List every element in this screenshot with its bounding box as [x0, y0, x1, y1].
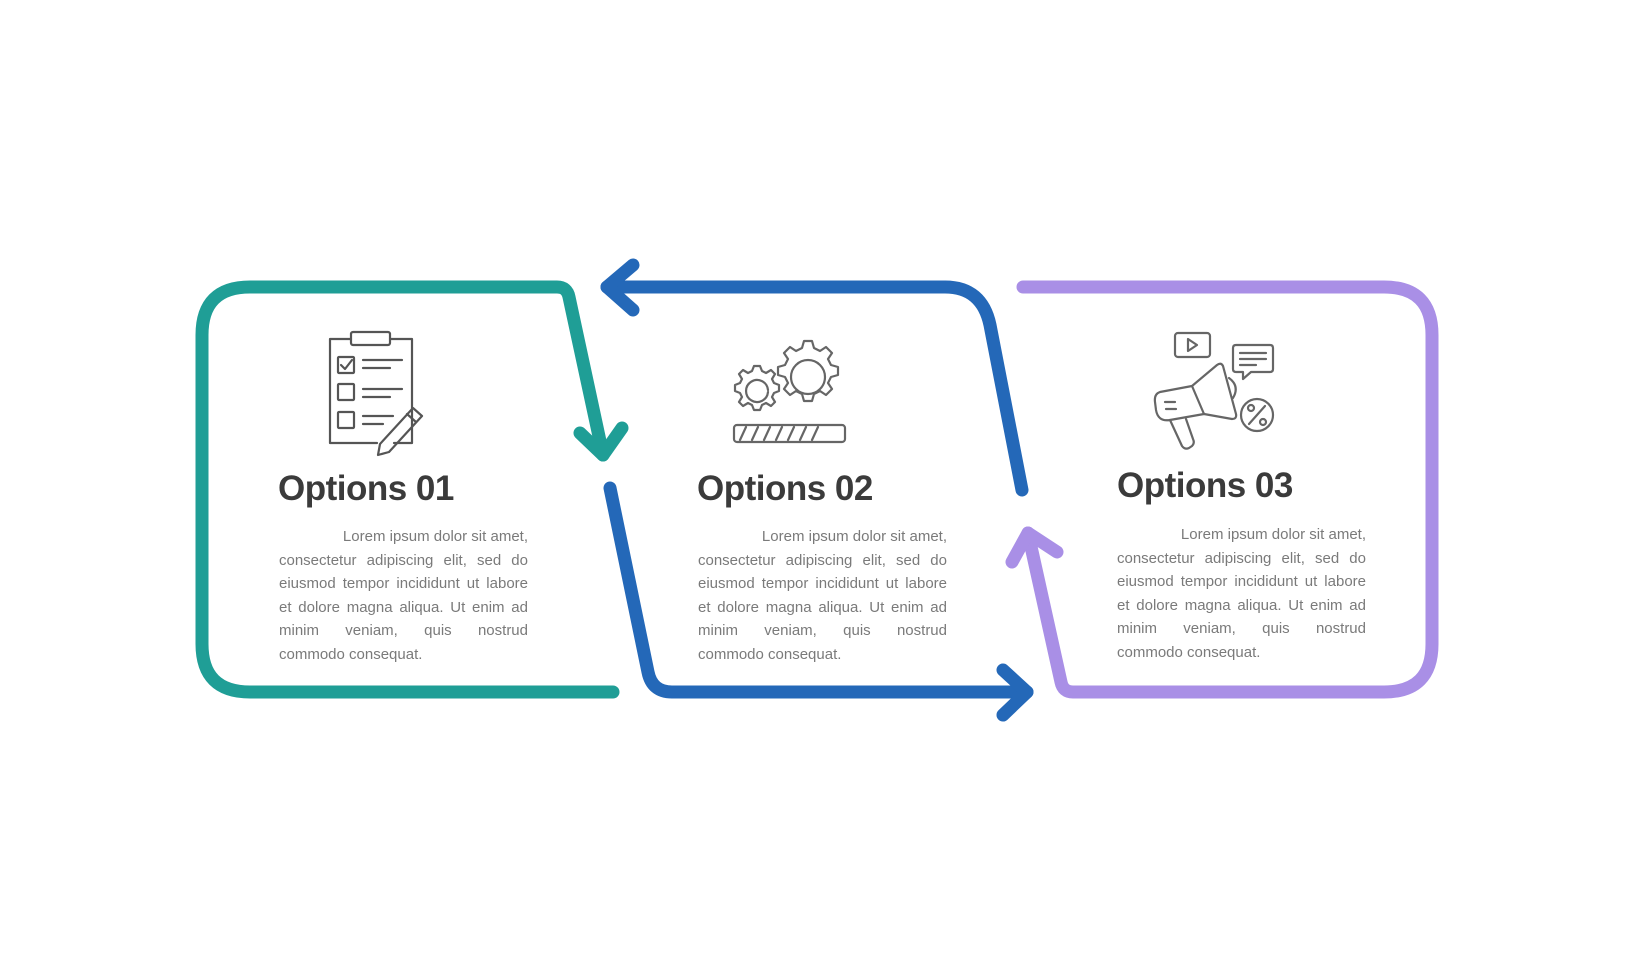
heading: Options 02: Options 02 [697, 469, 873, 508]
text block: option 1 body: et dolore magna aliqua. Ut enim ad [279, 599, 528, 616]
text block: option 1 body: consectetur adipiscing elit, sed do [279, 552, 528, 569]
text block: option 3 body: et dolore magna aliqua. Ut enim ad [1117, 597, 1366, 614]
text block: option 2 body: et dolore magna aliqua. Ut enim ad [698, 599, 947, 616]
icon: megaphone marketing [1155, 333, 1273, 449]
heading: Options 03: Options 03 [1117, 466, 1293, 505]
text block: option 2 body: minim veniam, quis nostrud [698, 622, 947, 639]
text block: option 3 body: commodo consequat. [1117, 644, 1260, 661]
text block: option 3 body: Lorem ipsum dolor sit amet, [1181, 526, 1366, 543]
text block: option 3 body: consectetur adipiscing elit, sed do [1117, 550, 1366, 567]
text block: option 1 body [279, 528, 528, 663]
icon: clipboard checklist [330, 332, 422, 455]
text block: option 3 body [1117, 526, 1366, 661]
text block: option 2 body: commodo consequat. [698, 646, 841, 663]
panel: purple frame with arrow [1012, 287, 1432, 692]
text block: option 3 body: minim veniam, quis nostrud [1117, 620, 1366, 637]
text block: option 1 body: eiusmod tempor incididunt ut labore [279, 575, 528, 592]
text block: option 2 body: consectetur adipiscing elit, sed do [698, 552, 947, 569]
arrow: blue top arrow pointing left [607, 265, 1022, 490]
icon: gears with progress bar [734, 341, 845, 442]
text block: option 2 body: eiusmod tempor incididunt ut labore [698, 575, 947, 592]
arrow: blue bottom arrow pointing right [610, 488, 1027, 715]
text block: option 1 body: commodo consequat. [279, 646, 422, 663]
text block: option 2 body [698, 528, 947, 663]
text block: option 3 body: eiusmod tempor incididunt ut labore [1117, 573, 1366, 590]
text block: option 1 body: Lorem ipsum dolor sit amet, [343, 528, 528, 545]
text block: option 1 body: minim veniam, quis nostrud [279, 622, 528, 639]
heading: Options 01: Options 01 [278, 469, 454, 508]
panel: teal frame with arrow [202, 287, 622, 692]
text block: option 2 body: Lorem ipsum dolor sit amet, [762, 528, 947, 545]
